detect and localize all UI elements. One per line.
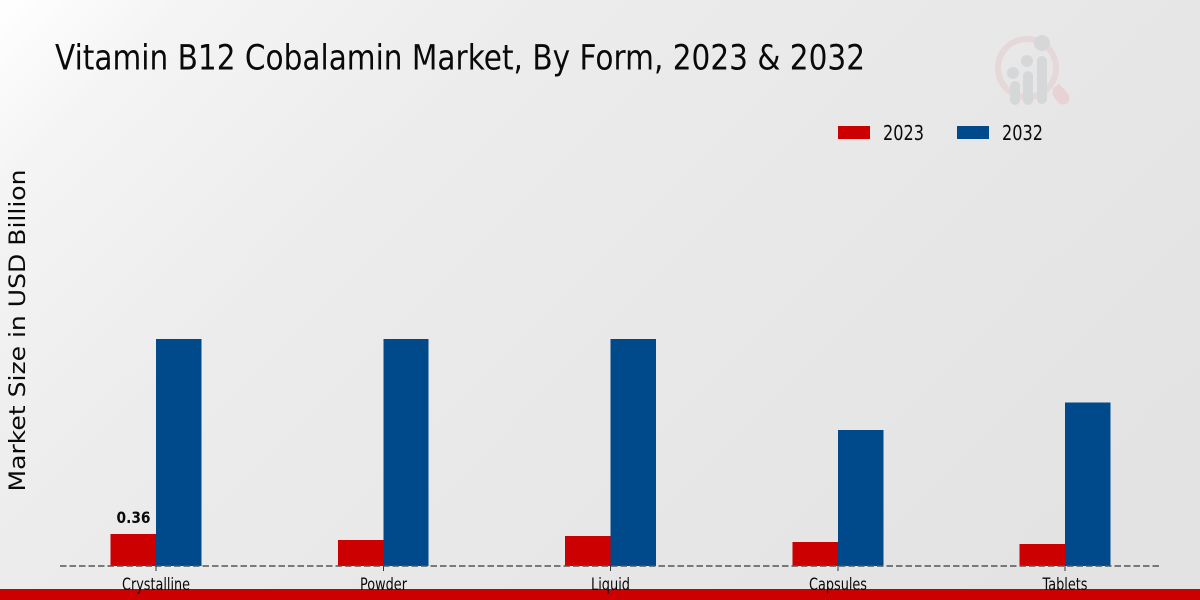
category labels: Tablets <box>1042 575 1088 595</box>
bottom red band <box>0 589 1200 600</box>
data label: 0.36 <box>116 508 150 527</box>
bars: Capsules <box>792 430 884 566</box>
bars: Liquid <box>565 339 656 566</box>
bar chart <box>60 339 1160 595</box>
bars: Tablets <box>1020 402 1110 566</box>
y axis title: Market Size in USD Billion <box>5 170 31 492</box>
legend: 2023 <box>883 121 924 145</box>
bars: Powder <box>338 339 428 566</box>
legend: 2032 <box>1002 121 1043 145</box>
legend <box>838 121 1043 145</box>
title: Vitamin B12 Cobalamin Market, By Form, 2023 & 2032 <box>55 38 865 78</box>
category labels: Liquid <box>591 575 630 595</box>
category labels: Capsules <box>809 575 867 595</box>
category labels: Powder <box>360 575 407 595</box>
watermark logo <box>998 35 1063 105</box>
baseline <box>60 565 1160 567</box>
category labels: Crystalline <box>122 575 190 595</box>
bars: Crystalline <box>110 339 202 566</box>
category labels <box>122 575 1088 595</box>
